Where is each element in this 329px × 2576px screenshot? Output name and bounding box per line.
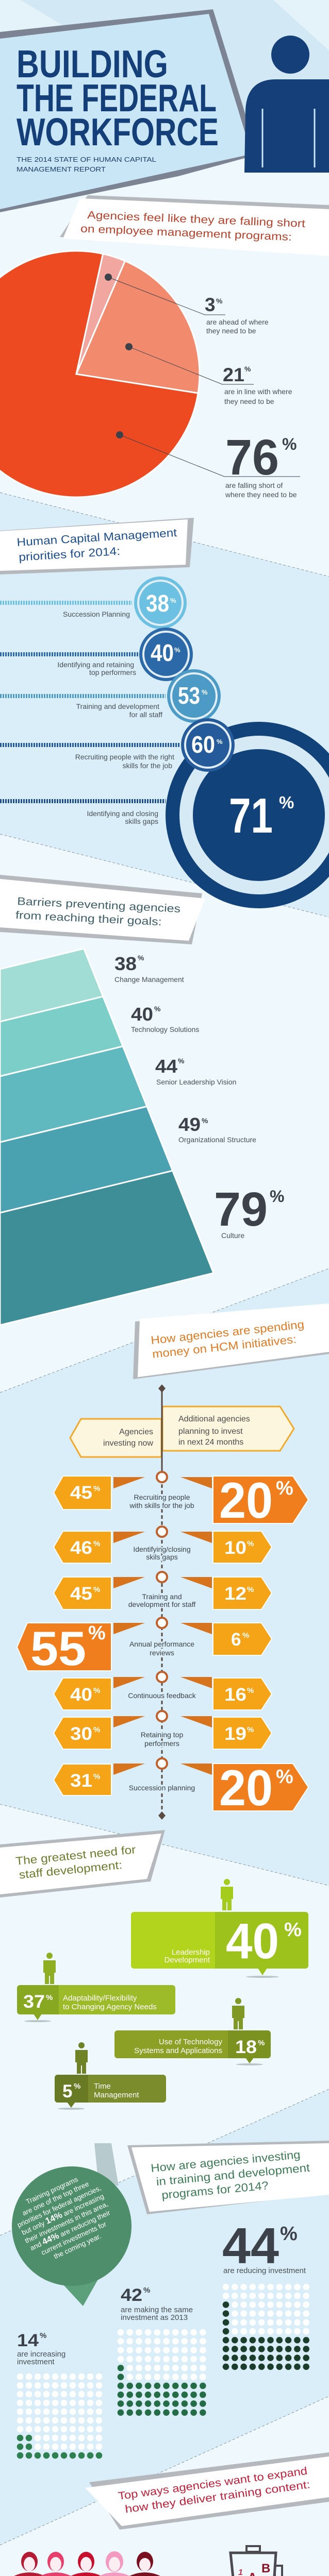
priority: 38%: %: [170, 597, 176, 604]
callout: green teardrop: current investments for: [40, 2220, 108, 2257]
timeline row: recruiting: %: [93, 1484, 100, 1493]
stat: 3%: are ahead of where: [206, 318, 269, 326]
barrier labels: Organizational Structure: [178, 1136, 256, 1144]
heading card: barriers: Barriers preventing agencies: [17, 895, 180, 915]
timeline row: skills gaps: 46: [70, 1538, 92, 1558]
need: technology 18%: Systems and Applications: [134, 2046, 222, 2055]
timeline line: [158, 1384, 166, 1820]
callout: green teardrop: the coming year.: [53, 2232, 102, 2260]
timeline row: skills gaps: skils gaps: [146, 1553, 178, 1561]
timeline row: recruiting: [54, 1472, 308, 1529]
priority: 53%: %: [202, 688, 208, 696]
timeline row: annual reviews: reviews: [150, 1649, 174, 1657]
priority: 60%: %: [217, 738, 223, 745]
timeline row: skills gaps: [54, 1527, 272, 1563]
priority: 40%: Identifying and retaining: [57, 660, 134, 669]
stat: 21%: they need to be: [224, 397, 274, 405]
stat: 3%: they need to be: [206, 327, 256, 335]
stat: 3%: [205, 294, 269, 335]
priority: 40%: 40: [151, 639, 174, 666]
need: time management 5%: Time: [94, 2082, 111, 2091]
stat: 76%: 76: [225, 429, 279, 485]
priority: 38%: [63, 577, 187, 629]
priority: 60%: [75, 718, 235, 772]
timeline row: skills gaps: Identifying/closing: [133, 1545, 191, 1553]
timeline row: training: 12: [224, 1584, 246, 1604]
timeline header signs: in next 24 months: [178, 1438, 243, 1447]
heading card: HCM priorities: priorities for 2014:: [19, 545, 121, 564]
barrier labels: Culture: [221, 1231, 244, 1240]
heading card: training investment: in training and development: [156, 2161, 310, 2188]
priority bars: [0, 603, 180, 801]
dot matrix: 44%: 44: [222, 2217, 279, 2274]
heading card: falling short: on employee management programs:: [80, 223, 292, 243]
priority: 71%: skills gaps: [125, 817, 158, 825]
timeline row: recruiting: with skills for the job: [129, 1501, 194, 1510]
dot matrix: 42%: investment as 2013: [121, 2313, 188, 2322]
need: technology 18%: Use of Technology: [159, 2038, 222, 2046]
stat: 3%: %: [216, 297, 223, 305]
need: time management 5%: %: [74, 2082, 80, 2091]
timeline row: continuous feedback: [54, 1672, 272, 1710]
barrier labels: Senior Leadership Vision: [156, 1078, 236, 1086]
heading card: barriers: [0, 875, 205, 944]
dot matrix: 14%: are increasing: [17, 2350, 65, 2359]
dot matrix: 42%: 42: [121, 2285, 142, 2305]
timeline row: training: 45: [70, 1584, 92, 1604]
callout: green teardrop: are one of the top three: [21, 2180, 90, 2217]
stat: 76%: %: [282, 435, 297, 453]
pie chart: [0, 251, 200, 497]
timeline row: skills gaps: %: [93, 1539, 100, 1548]
timeline row: annual reviews: 6: [231, 1630, 241, 1650]
dot matrix: 42%: [118, 2285, 208, 2418]
timeline row: annual reviews: 55: [30, 1621, 86, 1675]
barrier labels: 49: [178, 1114, 201, 1135]
title: [17, 42, 219, 154]
priority: 60%: 60: [191, 731, 215, 758]
need: adaptability 37%: [17, 1953, 175, 2022]
stat: 76%: are falling short of: [225, 481, 283, 489]
priority: 40%: [57, 628, 193, 681]
timeline header signs: Additional agencies: [178, 1415, 250, 1423]
dot matrix: 44%: %: [280, 2223, 298, 2245]
need: leadership 40%: 40: [226, 1913, 279, 1969]
timeline row: recruiting: 45: [70, 1483, 92, 1503]
need: technology 18%: %: [258, 2039, 265, 2047]
timeline row: continuous feedback: %: [247, 1686, 254, 1695]
priority: 53%: Training and development: [76, 702, 159, 710]
timeline row: continuous feedback: 40: [70, 1685, 92, 1705]
dot matrix: 42%: are making the same: [121, 2306, 193, 2314]
priority: 53%: for all staff: [129, 710, 162, 719]
timeline row: annual reviews: Annual performance: [129, 1640, 194, 1648]
stat: 21%: %: [244, 365, 251, 373]
stat: 3%: 3: [205, 294, 216, 315]
stat: 76%: [225, 429, 297, 499]
need: leadership 40%: Leadership: [172, 1948, 210, 1957]
priority: 38%: 38: [146, 590, 169, 617]
priority: 60%: Recruiting people with the right: [75, 753, 174, 761]
heading card: HCM priorities: [0, 518, 194, 574]
timeline row: annual reviews: %: [242, 1631, 249, 1640]
header panel: [0, 9, 258, 212]
dot matrix: 14%: 14: [17, 2331, 39, 2350]
barrier labels: %: [138, 954, 144, 962]
priority: 40%: top performers: [89, 668, 136, 676]
need: technology 18%: 18: [235, 2037, 257, 2057]
barrier labels: 38: [114, 953, 137, 974]
priority: 71%: 71: [229, 788, 273, 843]
need: leadership 40%: Development: [164, 1956, 210, 1964]
timeline row: retaining: [54, 1711, 272, 1749]
need: adaptability 37%: %: [46, 1993, 53, 2002]
timeline row: training: Training and: [142, 1592, 182, 1601]
timeline header signs: planning to invest: [178, 1427, 243, 1436]
need: adaptability 37%: 37: [23, 1992, 45, 2012]
icon: person silhouette: [244, 36, 329, 173]
barrier labels: %: [202, 1116, 208, 1125]
need: leadership 40%: [131, 1879, 308, 1978]
heading card: delivery: how they deliver training content:: [124, 2479, 311, 2515]
callout: green teardrop: priorities for federal agencies,: [16, 2184, 102, 2229]
timeline row: annual reviews: [17, 1618, 272, 1675]
priority: 71%: %: [279, 793, 294, 812]
need: time management 5%: [55, 2042, 166, 2110]
need: leadership 40%: %: [284, 1919, 302, 1941]
pie leaders: [108, 277, 300, 477]
dot matrix: 14%: investment: [17, 2358, 55, 2366]
dot matrix: 14%: [17, 2331, 104, 2461]
heading card: training investment: How are agencies investing: [150, 2148, 301, 2175]
timeline row: training: [54, 1572, 272, 1609]
priority: 71%: [87, 722, 329, 908]
timeline row: continuous feedback: Continuous feedback: [128, 1691, 196, 1700]
dot matrix: 42%: %: [143, 2286, 150, 2295]
heading card: delivery: Top ways agencies want to expand: [118, 2465, 308, 2502]
need: technology 18%: [114, 1998, 271, 2065]
callout: green teardrop: and 44% are reducing their: [28, 2207, 112, 2252]
need: adaptability 37%: to Changing Agency Needs: [63, 2003, 157, 2011]
timeline row: recruiting: %: [276, 1478, 293, 1499]
callout: green teardrop: [9, 2143, 131, 2306]
barrier labels: %: [178, 1057, 185, 1065]
timeline header signs: Agencies: [119, 1428, 153, 1436]
timeline row: training: %: [247, 1585, 254, 1594]
heading card: spending: How agencies are spending: [150, 1318, 305, 1347]
timeline header signs: investing now: [103, 1439, 153, 1448]
barrier labels: 40: [131, 1004, 153, 1025]
timeline row: succession: [54, 1758, 308, 1816]
stat: 76%: where they need to be: [225, 490, 297, 499]
heading card: staff development: [0, 1830, 165, 1897]
heading card: barriers: from reaching their goals:: [15, 909, 162, 928]
subtitle: [17, 156, 156, 173]
heading card: spending: money on HCM initiatives:: [152, 1333, 297, 1361]
timeline row: recruiting: Recruiting people: [134, 1493, 190, 1501]
subtitle: THE 2014 STATE OF HUMAN CAPITAL: [17, 156, 156, 163]
icon: five people busts: [12, 2551, 162, 2576]
barrier labels: %: [270, 1187, 284, 1206]
heading card: staff development: staff development:: [19, 1858, 123, 1881]
heading card: delivery: [85, 2452, 329, 2530]
title: BUILDING: [17, 42, 168, 86]
timeline row: succession: 31: [70, 1771, 92, 1791]
barrier labels: %: [154, 1005, 161, 1013]
barrier labels: [114, 953, 284, 1240]
timeline header signs: [70, 1406, 294, 1457]
need: time management 5%: Management: [94, 2091, 139, 2099]
timeline row: continuous feedback: 16: [224, 1685, 246, 1705]
need: time management 5%: 5: [62, 2081, 72, 2102]
barrier labels: Change Management: [114, 975, 184, 984]
subtitle: MANAGEMENT REPORT: [17, 165, 106, 173]
dot matrix: 44%: are reducing investment: [223, 2266, 306, 2275]
timeline row: training: %: [93, 1585, 100, 1594]
heading card: falling short: [60, 195, 329, 256]
barrier labels: 79: [214, 1182, 268, 1236]
timeline row: retaining: 30: [70, 1724, 92, 1744]
priority: 53%: 53: [178, 682, 200, 709]
dot matrix: 44%: [222, 2217, 311, 2372]
callout: green teardrop: their investments in this area,: [24, 2200, 109, 2245]
priority: 60%: skills for the job: [123, 761, 172, 770]
title: THE FEDERAL: [17, 76, 217, 120]
timeline row: training: development for staff: [128, 1600, 195, 1608]
title: WORKFORCE: [17, 110, 219, 154]
dot matrix: 14%: %: [40, 2331, 46, 2340]
heading card: spending: [133, 1303, 329, 1379]
timeline row: annual reviews: %: [88, 1622, 106, 1644]
stat: 21%: are in line with where: [224, 387, 292, 396]
timeline row: recruiting: 20: [219, 1472, 273, 1529]
stat: 21%: [223, 364, 292, 405]
timeline row: retaining: Retaining top: [141, 1731, 183, 1739]
timeline row: skills gaps: 10: [224, 1538, 246, 1558]
need: adaptability 37%: Adaptability/Flexibility: [63, 1994, 137, 2003]
timeline row: skills gaps: %: [247, 1539, 254, 1548]
priority: 71%: Identifying and closing: [87, 809, 158, 818]
timeline row: succession: %: [276, 1766, 293, 1788]
timeline row: continuous feedback: %: [93, 1686, 100, 1695]
priority: 40%: %: [174, 646, 180, 654]
icon: blender: [229, 2546, 282, 2576]
timeline row: retaining: performers: [144, 1739, 179, 1748]
priority: 38%: Succession Planning: [63, 610, 130, 618]
timeline row: retaining: 19: [224, 1724, 246, 1744]
callout: green teardrop: but only 14% are increasing: [20, 2191, 105, 2237]
heading card: training investment: [127, 2141, 329, 2214]
timeline row: retaining: %: [247, 1725, 254, 1734]
barrier labels: 44: [155, 1056, 177, 1077]
timeline row: retaining: %: [93, 1725, 100, 1734]
icon: blender: B: [261, 2562, 270, 2575]
timeline row: succession: 20: [219, 1759, 273, 1816]
heading card: training investment: programs for 2014?: [161, 2179, 269, 2201]
callout: green teardrop: Training programs: [25, 2175, 79, 2206]
stat: 21%: 21: [223, 364, 244, 385]
heading card: falling short: Agencies feel like they are falling short: [87, 209, 306, 230]
heading card: staff development: The greatest need for: [15, 1843, 136, 1868]
heading card: HCM priorities: Human Capital Management: [17, 526, 177, 549]
timeline row: succession: %: [93, 1772, 100, 1781]
barrier labels: Technology Solutions: [131, 1025, 199, 1033]
priority: 53%: [76, 669, 221, 723]
timeline row: succession: Succession planning: [129, 1784, 195, 1792]
barrier stacked bands: [0, 948, 213, 1325]
